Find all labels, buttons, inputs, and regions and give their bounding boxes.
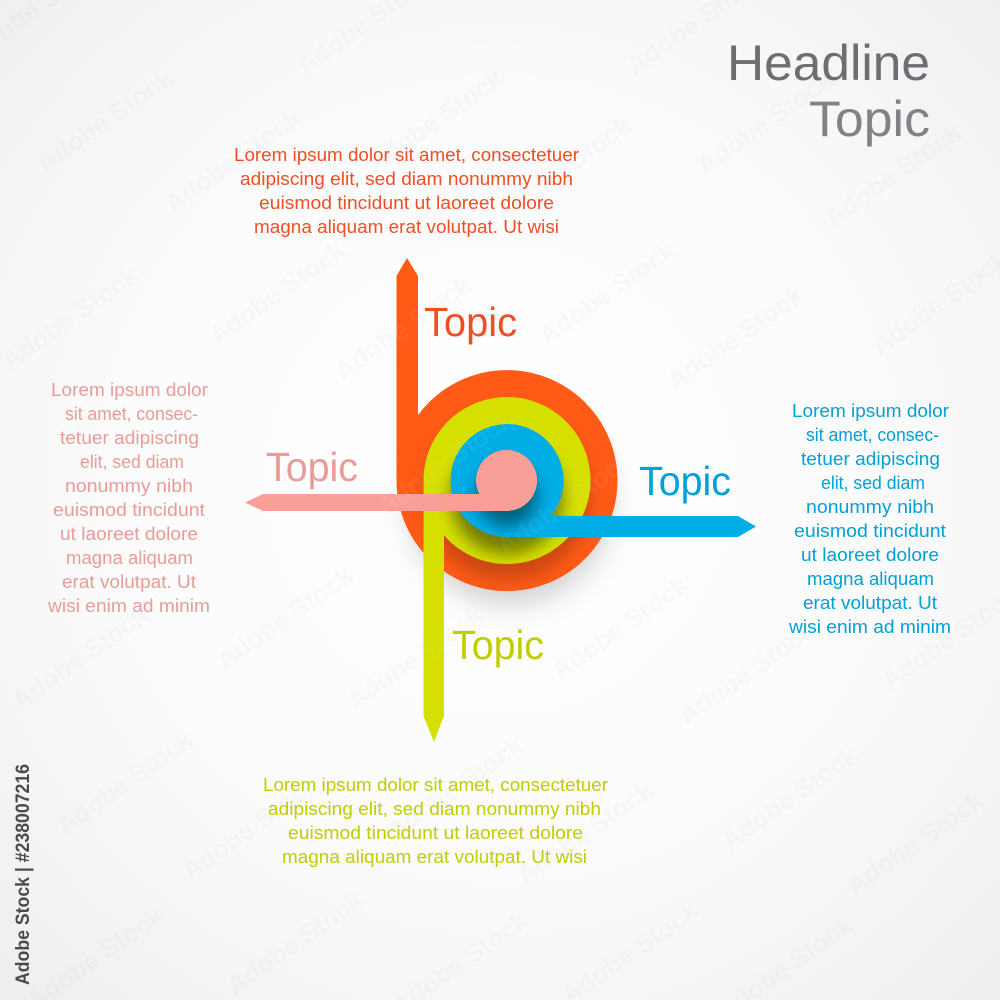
text block: blue: sit amet, consec- xyxy=(806,424,939,445)
label: yellow topic: Topic xyxy=(452,622,544,668)
arrow: pink xyxy=(245,450,537,511)
shadow on yellow xyxy=(451,442,563,554)
watermark pattern: Adobe Stock xyxy=(673,614,821,730)
watermark pattern: Adobe Stock xyxy=(329,269,477,385)
watermarks over shapes xyxy=(331,269,639,715)
text block: orange: Lorem ipsum dolor sit amet, consectetuer xyxy=(234,144,579,165)
watermark pattern: Adobe Stock xyxy=(31,62,179,178)
arrow: orange xyxy=(396,258,618,591)
headline: Topic xyxy=(809,91,930,147)
text block: pink: sit amet, consec- xyxy=(65,403,198,424)
watermark pattern: Adobe Stock xyxy=(819,116,967,232)
text block: blue: euismod tincidunt xyxy=(794,520,946,541)
watermark pattern: Adobe Stock xyxy=(716,739,864,855)
headline xyxy=(727,35,930,147)
watermark pattern: Adobe Stock xyxy=(381,729,529,845)
watermark pattern: Adobe Stock xyxy=(691,64,839,180)
text block: orange: euismod tincidunt ut laoreet dolore xyxy=(259,192,554,213)
watermarks over shapes: Adobe Stock xyxy=(346,599,494,715)
text block: blue: nonummy nibh xyxy=(806,496,934,517)
text block: yellow: Lorem ipsum dolor sit amet, consectetuer xyxy=(263,774,608,795)
watermark pattern: Adobe Stock xyxy=(361,62,509,178)
headline: Headline xyxy=(727,35,930,91)
watermarks over shapes: Adobe Stock xyxy=(331,269,479,385)
text block: pink: euismod tincidunt xyxy=(53,499,205,520)
stock id: Adobe Stock | #238007216 xyxy=(13,764,34,985)
text block: pink: Lorem ipsum dolor xyxy=(51,379,208,400)
watermark pattern: Adobe Stock xyxy=(661,279,809,395)
watermarks over shapes: Adobe Stock xyxy=(371,404,519,520)
text block: yellow: adipiscing elit, sed diam nonummy nibh xyxy=(268,798,601,819)
spiral diagram xyxy=(245,258,756,742)
watermark pattern: Adobe Stock xyxy=(211,559,359,675)
shadow on blue xyxy=(476,464,538,526)
shadow on orange xyxy=(417,456,597,587)
watermark pattern: Adobe Stock xyxy=(341,599,489,715)
arrow: blue xyxy=(451,424,756,537)
text block: pink: wisi enim ad minim xyxy=(47,595,210,616)
text block: blue: erat volutpat. Ut xyxy=(803,592,937,613)
text block: pink: elit, sed diam xyxy=(80,451,184,472)
text block: orange: adipiscing elit, sed diam nonummy nibh xyxy=(240,168,573,189)
watermark pattern: Adobe Stock xyxy=(159,102,307,218)
text block: pink: ut laoreet dolore xyxy=(60,523,198,544)
text block: pink: tetuer adipiscing xyxy=(60,427,199,448)
watermark pattern: Adobe Stock xyxy=(533,234,681,350)
text block: yellow: euismod tincidunt ut laoreet dolore xyxy=(288,822,583,843)
text block: orange xyxy=(234,144,579,237)
text block: blue xyxy=(788,400,951,637)
watermark pattern: Adobe Stock xyxy=(176,769,324,885)
drop shadow under orange disc xyxy=(408,401,612,605)
text block: pink xyxy=(47,379,210,616)
text block: orange: magna aliquam erat volutpat. Ut wisi xyxy=(254,216,559,237)
text block: pink: magna aliquam xyxy=(66,547,193,568)
watermark pattern: Adobe Stock xyxy=(221,884,369,1000)
text block: blue: elit, sed diam xyxy=(821,472,925,493)
watermark pattern: Adobe Stock xyxy=(203,234,351,350)
watermark pattern: Adobe Stock xyxy=(841,784,989,900)
text block: pink: erat volutpat. Ut xyxy=(62,571,196,592)
text block: blue: magna aliquam xyxy=(807,568,934,589)
watermark pattern: Adobe Stock xyxy=(511,774,659,890)
label: orange topic: Topic xyxy=(424,299,517,345)
label: blue topic: Topic xyxy=(639,458,731,504)
text block: blue: tetuer adipiscing xyxy=(801,448,940,469)
text block: yellow: magna aliquam erat volutpat. Ut wisi xyxy=(282,846,587,867)
watermark pattern: Adobe Stock xyxy=(51,724,199,840)
arrow: yellow xyxy=(424,397,590,742)
text block: blue: ut laoreet dolore xyxy=(801,544,939,565)
text block: pink: nonummy nibh xyxy=(65,475,193,496)
watermark pattern: Adobe Stock xyxy=(0,259,144,375)
label: pink topic: Topic xyxy=(266,444,358,490)
watermark pattern: Adobe Stock xyxy=(6,599,154,715)
text block: blue: wisi enim ad minim xyxy=(788,616,951,637)
watermark pattern: Adobe Stock xyxy=(546,569,694,685)
watermarks over shapes: Adobe Stock xyxy=(491,444,639,560)
text block: blue: Lorem ipsum dolor xyxy=(792,400,949,421)
text block: yellow xyxy=(263,774,608,867)
watermark pattern: Adobe Stock xyxy=(489,109,637,225)
